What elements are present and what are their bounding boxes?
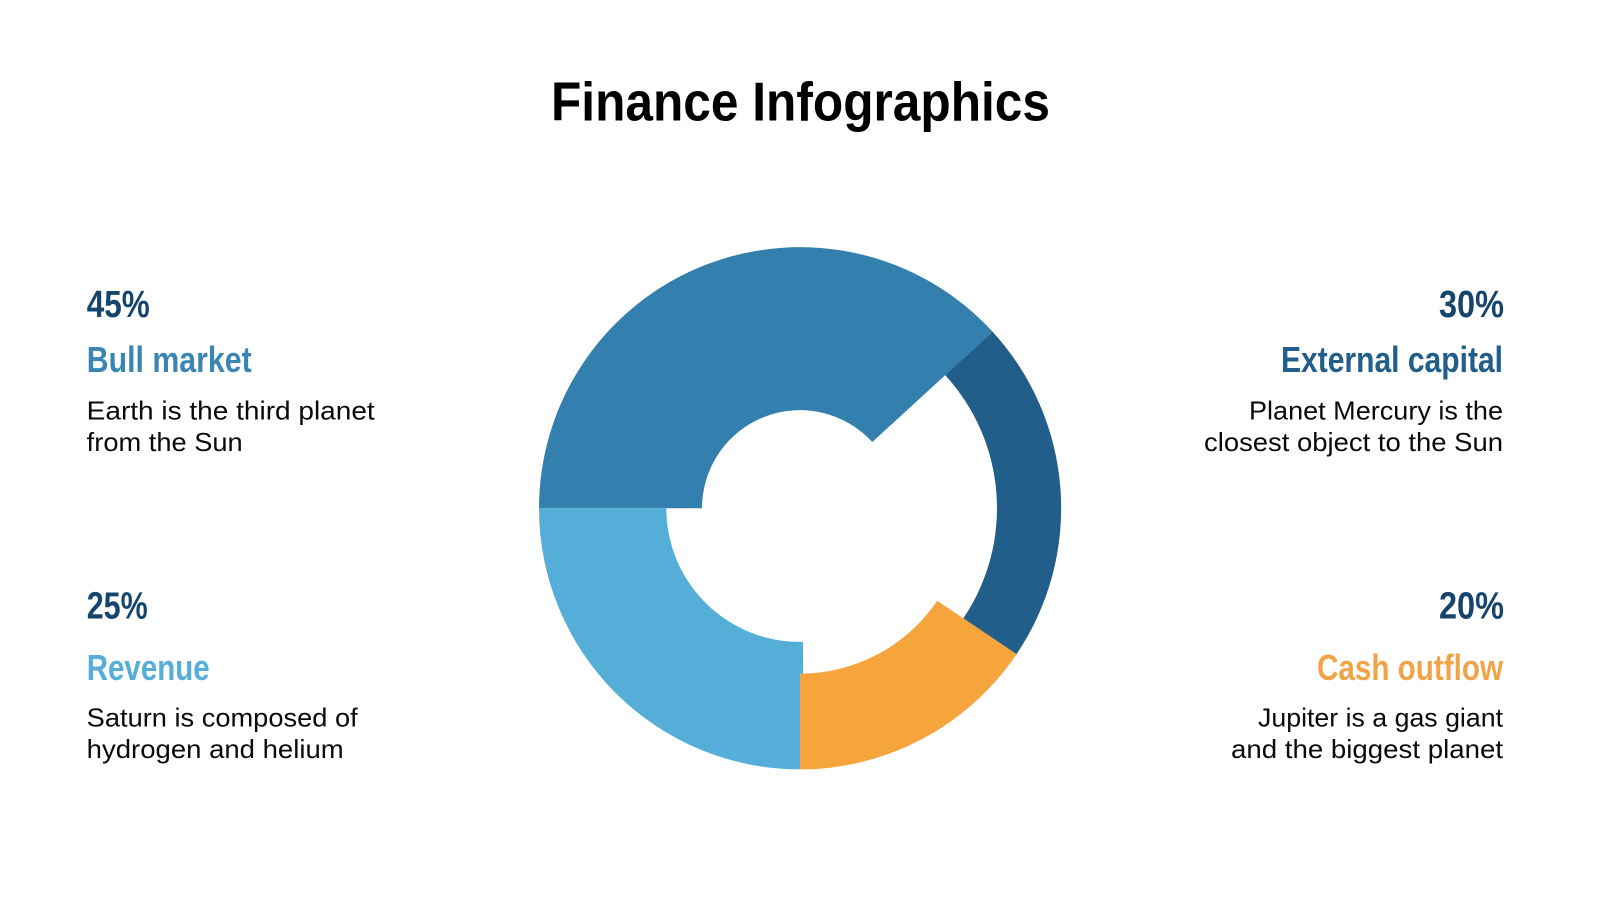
segment: bull market 45% bbox=[539, 247, 993, 508]
label: revenue: Revenue bbox=[87, 647, 210, 688]
description bbox=[87, 702, 359, 764]
panel: bull market bbox=[87, 284, 376, 457]
description: Earth is the third planet bbox=[87, 396, 376, 426]
panel: revenue bbox=[87, 586, 359, 764]
description: hydrogen and helium bbox=[87, 734, 344, 764]
description: closest object to the Sun bbox=[1204, 427, 1503, 457]
description bbox=[1204, 396, 1503, 457]
segment: cash outflow 20% bbox=[800, 601, 1016, 769]
percentage 25%: 25% bbox=[87, 586, 148, 628]
label: external capital: External capital bbox=[1281, 339, 1503, 380]
donut chart bbox=[539, 247, 1061, 769]
description: Planet Mercury is the bbox=[1249, 396, 1503, 426]
label: cash outflow: Cash outflow bbox=[1317, 647, 1503, 688]
segment: revenue 25% bbox=[539, 508, 803, 769]
description bbox=[1231, 702, 1504, 764]
label: bull market: Bull market bbox=[87, 339, 252, 380]
percentage 30%: 30% bbox=[1439, 284, 1504, 326]
description: Jupiter is a gas giant bbox=[1258, 702, 1504, 732]
segment: external capital 30% bbox=[945, 332, 1061, 654]
description bbox=[87, 396, 376, 457]
percentage 45%: 45% bbox=[87, 284, 150, 326]
panel: cash outflow bbox=[1231, 586, 1504, 764]
percentage 20%: 20% bbox=[1439, 586, 1504, 628]
title: Finance Infographics bbox=[551, 70, 1050, 132]
description: from the Sun bbox=[87, 427, 243, 457]
description: and the biggest planet bbox=[1231, 734, 1504, 764]
panel: external capital bbox=[1204, 284, 1504, 457]
description: Saturn is composed of bbox=[87, 702, 359, 732]
